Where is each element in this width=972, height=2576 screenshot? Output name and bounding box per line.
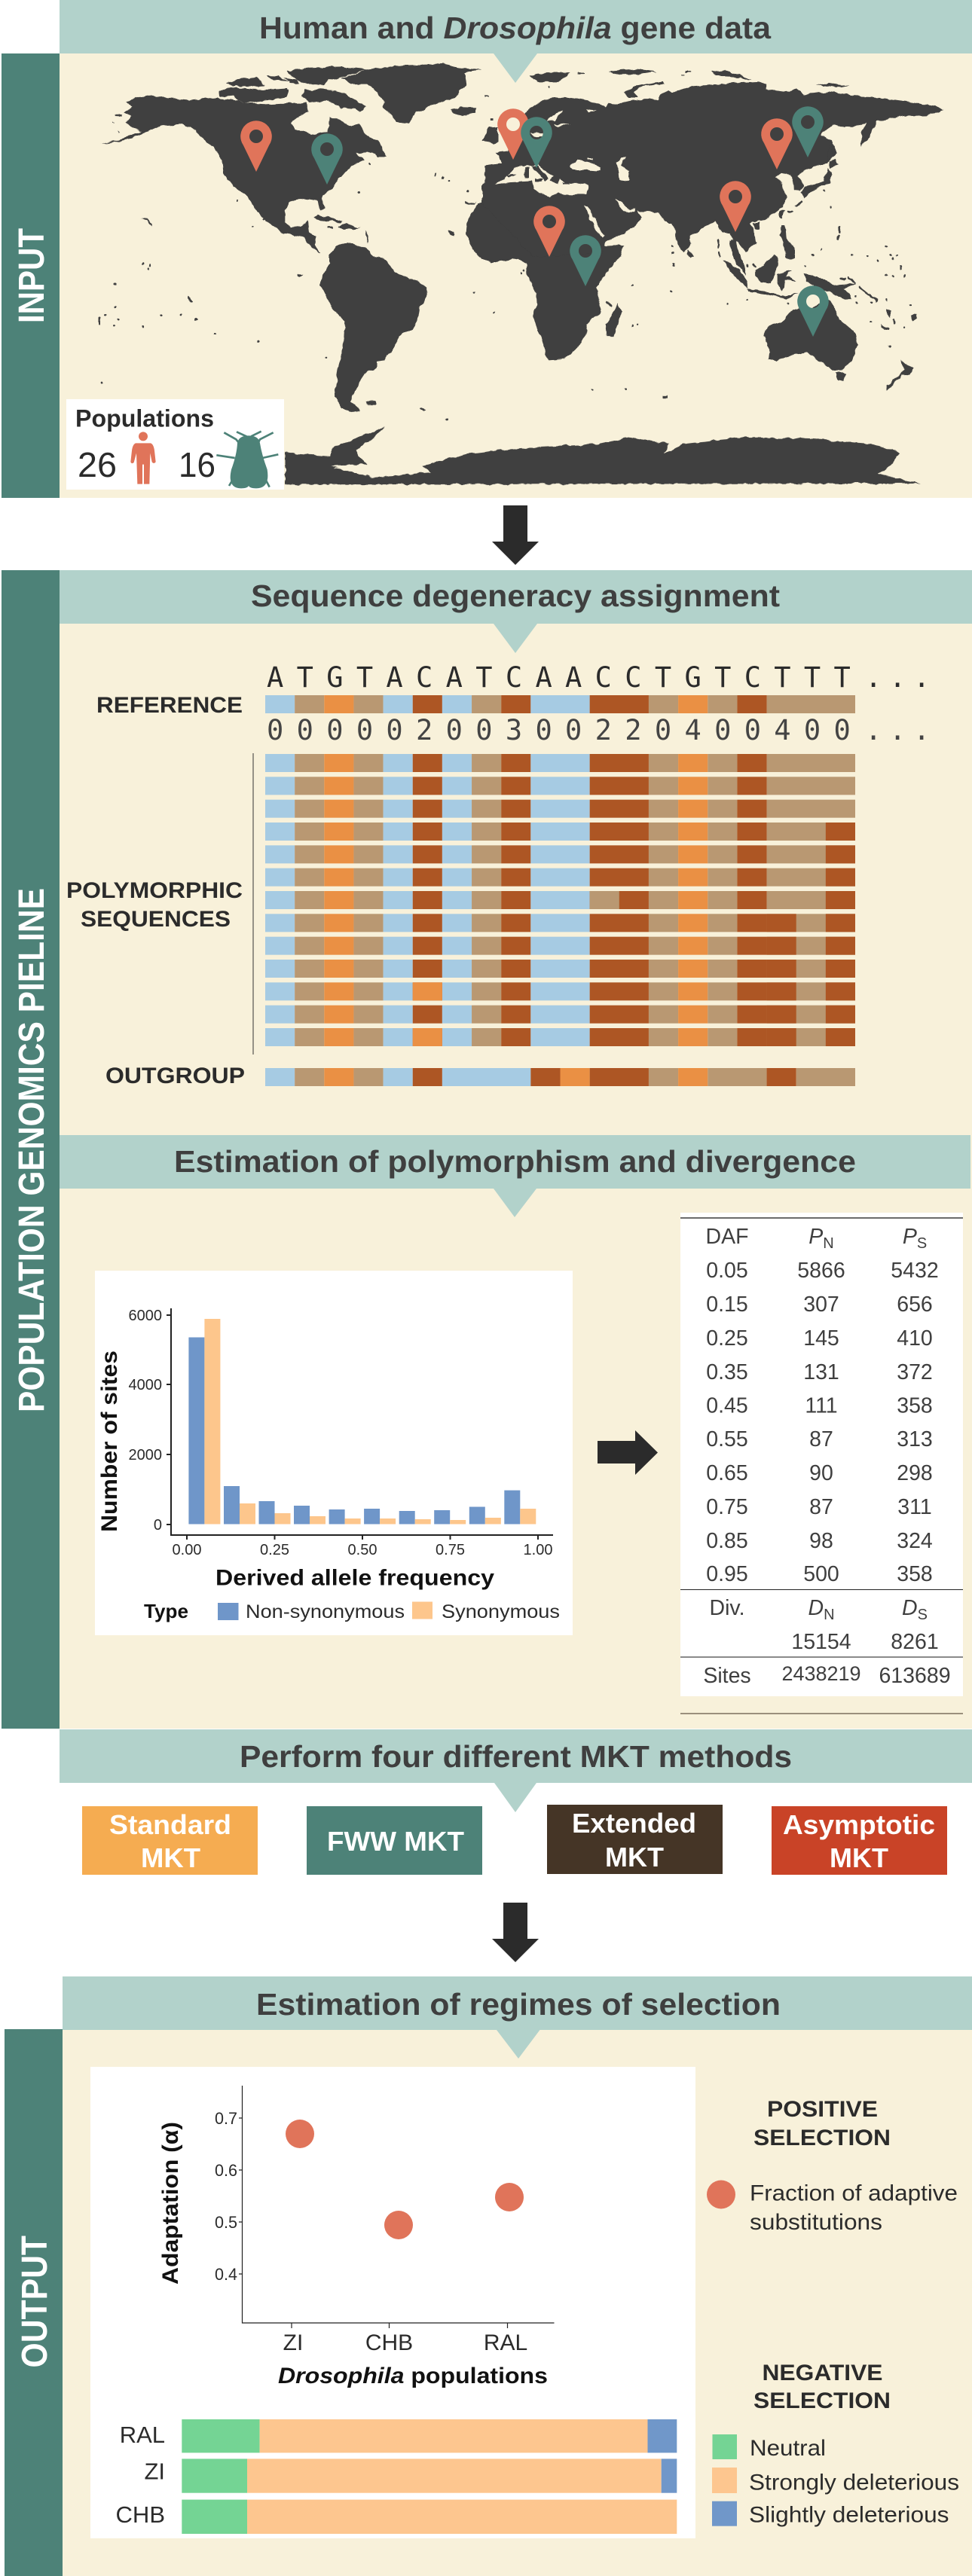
side label bar: pipeline: POPULATION GENOMICS PIELINE [12, 888, 52, 1412]
x axis title: Derived allele frequency [215, 1565, 494, 1591]
method box: extended mkt: MKT [605, 1842, 664, 1872]
chart legend: Type [144, 1600, 188, 1622]
y tick labels: 2000 [128, 1447, 162, 1463]
table rows: 372 [897, 1360, 933, 1384]
populations legend box: 26 [78, 445, 117, 484]
table rows: 324 [897, 1529, 933, 1553]
side label bar: input: INPUT [12, 228, 52, 323]
label: polymorphic sequences: SEQUENCES [81, 907, 231, 932]
divergence rows [710, 1596, 939, 1654]
map pins [240, 106, 829, 337]
y ticks: 0.7 [215, 2109, 237, 2128]
table rows: 5866 [797, 1259, 845, 1283]
table rows: 298 [897, 1461, 933, 1485]
bar labels: CHB [116, 2501, 165, 2528]
negative selection legend: Strongly deleterious [749, 2471, 959, 2495]
icon: fly [216, 432, 278, 488]
reference colour row [265, 695, 855, 713]
table rows: 0.85 [706, 1529, 748, 1553]
table rows: 358 [897, 1393, 933, 1418]
method box: asymptotic mkt: Asymptotic [783, 1809, 935, 1840]
negative selection legend: SELECTION [753, 2388, 891, 2413]
panel: output [5, 1976, 972, 2576]
method box: fww mkt: FWW MKT [327, 1826, 464, 1857]
table rows: 87 [809, 1427, 833, 1451]
scatter chart: adaptation [158, 2086, 555, 2388]
table rows: 87 [809, 1495, 833, 1519]
y ticks: 0.4 [215, 2265, 237, 2284]
side label bar: pipeline [2, 570, 60, 1729]
table rows: 5432 [891, 1259, 939, 1283]
heading: estimation of polymorphism and divergence [60, 1135, 970, 1217]
bar labels [116, 2422, 165, 2528]
chart legend: Synonymous [442, 1601, 560, 1622]
chart axes [167, 1308, 553, 1540]
table header: P [808, 1225, 823, 1249]
panel: population genomics pipeline [2, 570, 972, 1729]
method box: extended mkt [547, 1805, 723, 1874]
heading: sequence degeneracy assignment: Sequence degeneracy assignment [251, 578, 780, 613]
y tick labels [128, 1308, 162, 1534]
side label bar: input [2, 53, 60, 498]
heading: perform four different mkt methods [60, 1729, 972, 1812]
chart legend: Non-synonymous [246, 1601, 405, 1622]
x tick labels: 1.00 [524, 1542, 552, 1558]
heading: sequence degeneracy assignment [60, 570, 972, 653]
table rows: 0.25 [706, 1326, 748, 1351]
positive selection legend: POSITIVE [767, 2097, 878, 2122]
method box: asymptotic mkt [772, 1806, 947, 1875]
label: reference: REFERENCE [96, 693, 243, 718]
table rows: 313 [897, 1427, 933, 1451]
bracket line [253, 753, 254, 1055]
table rows: 0.45 [706, 1393, 748, 1418]
x ticks: ZI [283, 2330, 303, 2355]
x tick labels: 0.25 [260, 1542, 289, 1558]
heading: estimation of polymorphism and divergence: Estimation of polymorphism and divergence [174, 1144, 856, 1179]
x ticks: CHB [365, 2330, 413, 2355]
table rows: 0.55 [706, 1427, 748, 1451]
y tick labels: 6000 [128, 1308, 162, 1324]
table header: DAF [705, 1225, 749, 1249]
data table [680, 1213, 963, 1714]
table rows: 500 [803, 1562, 839, 1586]
trailing dots: digits: ... [865, 714, 937, 746]
table header: S [917, 1235, 927, 1252]
bars: synonymous [204, 1319, 536, 1525]
y tick labels: 4000 [128, 1377, 162, 1393]
table rows: 0.15 [706, 1293, 748, 1317]
arrow: chart to table [598, 1430, 658, 1475]
x ticks: RAL [484, 2330, 527, 2355]
positive selection legend: Fraction of adaptive [750, 2181, 958, 2205]
arrow: input to pipeline [492, 505, 539, 565]
negative selection legend: Slightly deleterious [749, 2503, 949, 2528]
method box: standard mkt: MKT [141, 1842, 200, 1873]
divergence rows: 15154 [791, 1630, 851, 1654]
icon: human [130, 432, 156, 484]
table rows: 0.95 [706, 1562, 748, 1586]
method box: standard mkt: Standard [109, 1809, 231, 1840]
y axis title: Number of sites [97, 1351, 122, 1532]
x tick labels [173, 1542, 552, 1558]
table rows: 656 [897, 1293, 933, 1317]
x tick labels: 0.50 [348, 1542, 377, 1558]
x ticks [283, 2330, 527, 2355]
table header [705, 1225, 927, 1252]
heading: estimation of regimes of selection [63, 1976, 972, 2059]
table rows: 0.65 [706, 1461, 748, 1485]
table rows: 0.75 [706, 1495, 748, 1519]
table rows: 358 [897, 1562, 933, 1586]
bar labels: RAL [120, 2422, 165, 2448]
populations legend box: Populations [75, 405, 214, 432]
table rows: 311 [897, 1495, 932, 1519]
positive selection legend: substitutions [750, 2210, 882, 2235]
table rows: 131 [803, 1360, 839, 1384]
trailing dots: nucleotides: ... [865, 661, 937, 694]
polymorphic sequence rows [265, 754, 855, 1046]
table rows: 307 [803, 1293, 839, 1317]
table rows: 90 [809, 1461, 833, 1485]
table rows: 145 [803, 1326, 839, 1351]
divergence rows: D [902, 1596, 918, 1620]
table rows [706, 1259, 939, 1586]
negative selection legend [712, 2361, 959, 2528]
heading: estimation of regimes of selection: Estimation of regimes of selection [256, 1987, 781, 2022]
sites row: 613689 [879, 1664, 951, 1688]
panel: input [2, 0, 972, 498]
table rows: 410 [897, 1326, 933, 1351]
chart legend [144, 1600, 560, 1622]
x axis title: Drosophila populations [278, 2364, 548, 2388]
x tick labels: 0.75 [436, 1542, 465, 1558]
label: outgroup: OUTGROUP [105, 1064, 245, 1088]
stacked bars: selection fractions [116, 2419, 677, 2534]
divergence rows: S [918, 1607, 928, 1623]
negative selection legend: NEGATIVE [763, 2361, 883, 2385]
side label bar: output [5, 2029, 63, 2576]
arrow: methods to output [492, 1903, 539, 1962]
divergence rows: Div. [710, 1596, 744, 1620]
divergence rows: D [808, 1596, 824, 1620]
sites row [703, 1662, 951, 1688]
table header: P [903, 1225, 917, 1249]
positive selection legend: SELECTION [753, 2126, 891, 2150]
table rows: 111 [805, 1393, 838, 1418]
method box: asymptotic mkt: MKT [830, 1842, 888, 1873]
positive selection legend [707, 2097, 958, 2235]
world map [99, 64, 945, 484]
table rows: 0.35 [706, 1360, 748, 1384]
y axis title: Adaptation (α) [158, 2122, 183, 2285]
label: polymorphic sequences [66, 878, 243, 932]
y ticks: 0.6 [215, 2161, 237, 2180]
white chart panel [90, 2067, 695, 2538]
bar chart: derived allele frequency [95, 1271, 573, 1635]
bars: non-synonymous [188, 1338, 520, 1525]
outgroup row [265, 1068, 855, 1086]
heading: human and drosophila gene data [60, 0, 972, 83]
side label bar: output: OUTPUT [15, 2236, 55, 2368]
data points [286, 2120, 524, 2239]
table rows: 0.05 [706, 1259, 748, 1283]
y tick labels: 0 [154, 1517, 162, 1534]
table header: N [823, 1235, 834, 1252]
populations legend box: 16 [179, 445, 215, 484]
method box: fww mkt [307, 1806, 482, 1875]
sites row: Sites [703, 1664, 751, 1688]
divergence rows: 8261 [891, 1630, 939, 1654]
label: polymorphic sequences: POLYMORPHIC [66, 878, 243, 903]
bar labels: ZI [144, 2458, 165, 2484]
populations legend box [66, 399, 284, 490]
negative selection legend: Neutral [750, 2436, 826, 2461]
heading: human and drosophila gene data: Human and Drosophila gene data [259, 11, 772, 45]
method box: extended mkt: Extended [572, 1808, 696, 1839]
x tick labels: 0.00 [173, 1542, 201, 1558]
reference nucleotides: ATGTACATCAACCTGTCTTT [267, 661, 863, 694]
y ticks: 0.5 [215, 2213, 237, 2232]
heading: perform four different mkt methods: Perform four different MKT methods [240, 1739, 792, 1774]
method box: standard mkt [82, 1806, 258, 1875]
divergence rows: N [824, 1607, 835, 1623]
sites row: 2438219 [781, 1662, 861, 1685]
y ticks [215, 2109, 237, 2284]
table rows: 98 [809, 1529, 833, 1553]
degeneracy digits: 00000200300220400400 [267, 714, 863, 746]
